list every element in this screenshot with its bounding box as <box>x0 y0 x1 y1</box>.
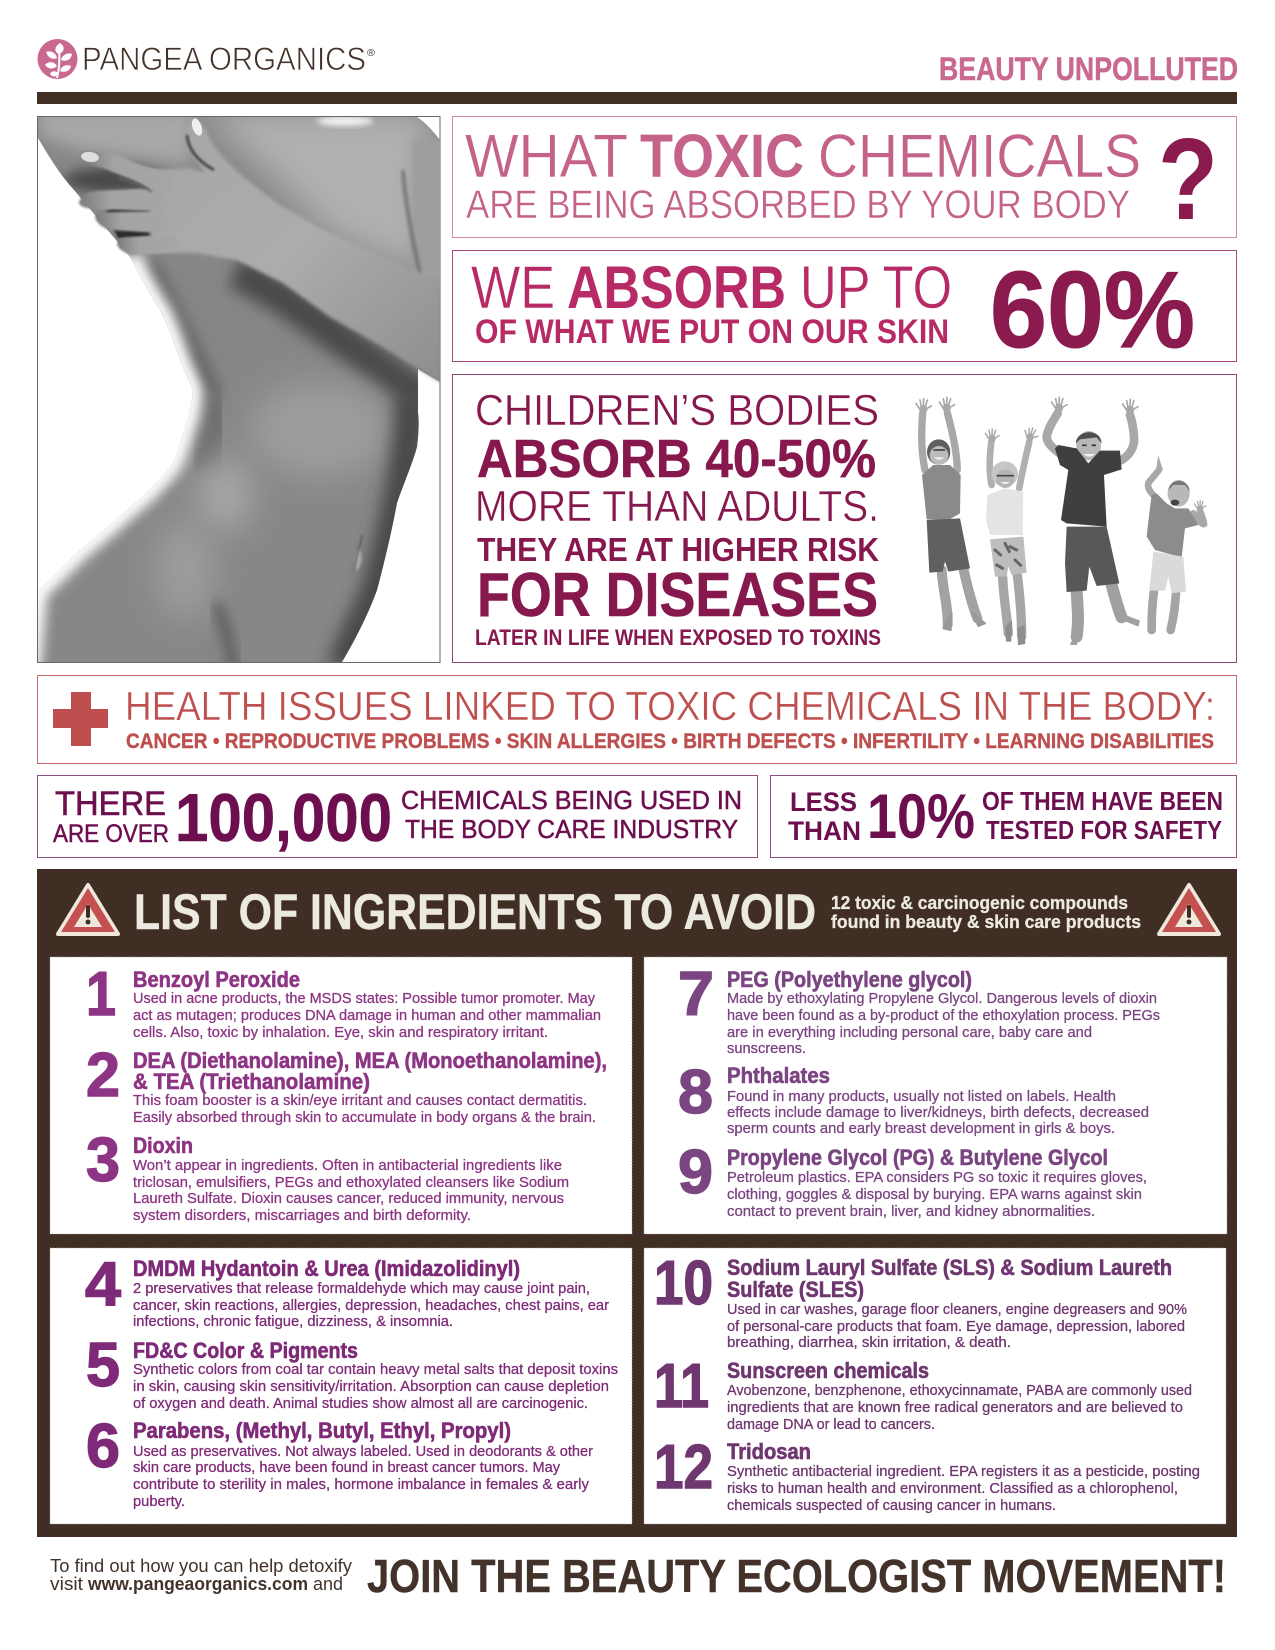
statistic: 60%: 60% <box>990 249 1195 371</box>
subheading: 12 toxic & carcinogenic compounds <box>831 893 1128 913</box>
ingredient 10: Sodium Lauryl Sulfate (SLS) & Sodium Laureth <box>727 1255 1172 1280</box>
text block: children absorb more <box>475 386 881 650</box>
ingredient 2: This foam booster is a skin/eye irritant and causes contact dermatitis. <box>133 1093 587 1109</box>
ingredient 2: DEA (Diethanolamine), MEA (Monoethanolamine), <box>133 1048 607 1073</box>
ingredient 9: contact to prevent brain, liver, and kidney abnormalities. <box>727 1204 1095 1220</box>
ingredient 11: Sunscreen chemicals <box>727 1358 929 1383</box>
subheading <box>831 893 1141 932</box>
question mark: ? <box>1158 114 1218 244</box>
ingredient 5: FD&C Color & Pigments <box>133 1338 358 1363</box>
ingredient 10: Sulfate (SLES) <box>727 1277 864 1302</box>
panel: ingredients 4 to 6 <box>50 1248 632 1524</box>
ingredient 1: Used in acne products, the MSDS states: Possible tumor promoter. May <box>133 991 596 1007</box>
panel: list of ingredients to avoid <box>37 869 1237 1537</box>
ingredient 10: 10 <box>654 1249 713 1318</box>
ingredient 6: puberty. <box>133 1494 185 1510</box>
heading: we absorb: OF WHAT WE PUT ON OUR SKIN <box>475 313 949 351</box>
ingredient 12: chemicals suspected of causing cancer in humans. <box>727 1498 1056 1514</box>
ingredient 7: 7 <box>678 960 714 1029</box>
ingredient 5: 5 <box>86 1331 120 1400</box>
ingredient 3: 3 <box>86 1126 120 1195</box>
panel: we absorb 60% <box>452 249 1236 371</box>
panel: 100,000 chemicals: ARE OVER <box>53 820 169 848</box>
panel: health issues <box>38 676 1236 764</box>
ingredient 8: sperm counts and early breast development in girls & boys. <box>727 1121 1115 1137</box>
panel: 100,000 chemicals: CHEMICALS BEING USED IN <box>401 785 742 815</box>
statistic: 100,000: 100,000 <box>175 780 392 856</box>
ingredient 4: cancer, skin reactions, allergies, depression, headaches, chest pains, ear <box>133 1298 609 1314</box>
footer: how to help: To find out how you can help detoxify <box>50 1555 353 1576</box>
ingredient 10: of personal-care products that foam. Eye damage, depression, labored <box>727 1319 1185 1335</box>
heading: we absorb: UP TO <box>800 254 952 321</box>
panel: children's bodies <box>452 374 1236 662</box>
ingredient 7: sunscreens. <box>727 1041 806 1057</box>
ingredient 10: Used in car washes, garage floor cleaners, engine degreasers and 90% <box>727 1302 1187 1318</box>
ingredient 12: 12 <box>654 1433 713 1502</box>
ingredient 3: system disorders, miscarriages and birth deformity. <box>133 1208 471 1224</box>
panel: 100,000 chemicals <box>38 776 758 858</box>
child 2 <box>985 426 1039 645</box>
ingredient 1: cells. Also, toxic by inhalation. Eye, skin and respiratory irritant. <box>133 1025 548 1041</box>
ingredient 4: 2 preservatives that release formaldehyde which may cause joint pain, <box>133 1281 590 1297</box>
ingredient 8: Found in many products, usually not listed on labels. Health <box>727 1089 1116 1105</box>
ingredient 2: & TEA (Triethanolamine) <box>133 1069 370 1094</box>
ingredient 6: Parabens, (Methyl, Butyl, Ethyl, Propyl) <box>133 1418 511 1443</box>
icon: warning triangle left <box>58 885 118 934</box>
footer: how to help: www.pangeaorganics.com <box>87 1573 308 1594</box>
footer: how to help: visit <box>50 1573 83 1594</box>
text block: children absorb more: CHILDREN’S BODIES <box>475 386 879 435</box>
panel: less than 10%: THAN <box>788 816 861 846</box>
panel: body photo <box>30 110 450 670</box>
heading: what toxic chemicals: WHAT <box>465 122 628 190</box>
ingredient 2: 2 <box>86 1041 120 1110</box>
ingredient 2 <box>86 1041 607 1126</box>
child 1 <box>916 397 985 630</box>
ingredient 4: infections, chronic fatigue, dizziness, & insomnia. <box>133 1314 453 1330</box>
heading: what toxic chemicals: CHEMICALS <box>818 122 1141 190</box>
heading: what toxic chemicals: TOXIC <box>640 122 804 190</box>
ingredient 9 <box>678 1138 1147 1220</box>
panel: less than 10%: TESTED FOR SAFETY <box>986 815 1222 845</box>
ingredient 2: Easily absorbed through skin to accumulate in body organs & the brain. <box>133 1110 596 1126</box>
logo: Pangea Organics: ® <box>367 48 376 59</box>
panel: less than 10% <box>770 776 1236 858</box>
ingredient 5: Synthetic colors from coal tar contain heavy metal salts that deposit toxins <box>133 1362 618 1378</box>
ingredient 7 <box>678 960 1160 1057</box>
child 4 <box>1147 455 1206 630</box>
ingredient 12: risks to human health and environment. Classified as a chlorophenol, <box>727 1481 1178 1497</box>
ingredient 10: breathing, diarrhea, skin irritation, & death. <box>727 1335 1011 1351</box>
ingredient 5: of oxygen and death. Animal studies show almost all are carcinogenic. <box>133 1396 588 1412</box>
icon: red cross <box>53 692 108 746</box>
photo: jumping children <box>916 397 1206 645</box>
heading: we absorb <box>471 254 952 351</box>
ingredient 8 <box>678 1058 1149 1137</box>
text block: children absorb more: MORE THAN ADULTS. <box>475 482 879 531</box>
panel: less than 10%: OF THEM HAVE BEEN <box>982 786 1223 816</box>
ingredient 11: Avobenzone, benzphenone, ethoxycinnamate, PABA are commonly used <box>727 1383 1192 1399</box>
ingredient 12: Tridosan <box>727 1439 811 1464</box>
ingredient 7: have been found as a by-product of the ethoxylation process. PEGs <box>727 1008 1160 1024</box>
ingredient 8: Phthalates <box>727 1063 830 1088</box>
child 3 <box>1047 397 1140 645</box>
panel: ingredients 7 to 9 <box>644 957 1227 1234</box>
ingredient 7: PEG (Polyethylene glycol) <box>727 967 972 992</box>
ingredient 11: 11 <box>654 1352 709 1421</box>
ingredient 1 <box>86 960 601 1041</box>
ingredient 8: 8 <box>678 1058 713 1127</box>
footer: how to help <box>50 1555 353 1594</box>
header bar <box>37 92 1237 104</box>
subheading: found in beauty & skin care products <box>831 912 1141 932</box>
panel: ingredients 10 to 12 <box>644 1248 1226 1524</box>
ingredient 12 <box>654 1433 1200 1514</box>
ingredient 1: 1 <box>86 960 116 1029</box>
ingredient 12: Synthetic antibacterial ingredient. EPA registers it as a pesticide, posting <box>727 1464 1200 1480</box>
heading: list of ingredients to avoid: LIST OF INGREDIENTS TO AVOID <box>134 884 816 940</box>
ingredient 7: are in everything including personal care, baby care and <box>727 1025 1092 1041</box>
heading: we absorb: WE <box>471 254 555 321</box>
ingredient 4 <box>85 1250 609 1330</box>
heading: what toxic chemicals <box>465 122 1141 227</box>
ingredient 4: DMDM Hydantoin & Urea (Imidazolidinyl) <box>133 1256 520 1281</box>
ingredient 6 <box>86 1412 593 1510</box>
logo: Pangea Organics: PANGEA ORGANICS <box>82 41 366 77</box>
ingredient 1: act as mutagen; produces DNA damage in human and other mammalian <box>133 1008 601 1024</box>
ingredient 5: in skin, causing skin sensitivity/irritation. Absorption can cause depletion <box>133 1379 609 1395</box>
ingredient 9: 9 <box>678 1138 713 1207</box>
ingredient 6: 6 <box>86 1412 120 1481</box>
ingredient 3: Dioxin <box>133 1133 193 1158</box>
panel: 100,000 chemicals: THE BODY CARE INDUSTRY <box>405 814 738 844</box>
heading: what toxic chemicals: ARE BEING ABSORBED BY YOUR BODY <box>466 183 1130 227</box>
ingredient 3: Laureth Sulfate. Dioxin causes cancer, reduced immunity, nervous <box>133 1191 564 1207</box>
text block: children absorb more: LATER IN LIFE WHEN EXPOSED TO TOXINS <box>475 625 881 650</box>
ingredient 9: Petroleum plastics. EPA considers PG so toxic it requires gloves, <box>727 1170 1147 1186</box>
ingredient 1: Benzoyl Peroxide <box>133 967 300 992</box>
text block: children absorb more: THEY ARE AT HIGHER RISK <box>477 531 879 568</box>
ingredient 3 <box>86 1126 569 1224</box>
text block: children absorb more: ABSORB 40-50% <box>477 429 876 489</box>
ingredient 3: triclosan, emulsifiers, PEGs and ethoxylated cleansers like Sodium <box>133 1175 569 1191</box>
text block: children absorb more: FOR DISEASES <box>477 561 878 630</box>
ingredient 11: damage DNA or lead to cancers. <box>727 1417 935 1433</box>
panel: ingredients 1 to 3 <box>50 957 632 1234</box>
ingredient 9: clothing, goggles & disposal by burying. EPA warns against skin <box>727 1187 1142 1203</box>
ingredient 7: Made by ethoxylating Propylene Glycol. Dangerous levels of dioxin <box>727 991 1157 1007</box>
panel: less than 10%: LESS <box>790 787 857 817</box>
icon: warning triangle right <box>1159 885 1219 934</box>
ingredient 4: 4 <box>85 1250 122 1319</box>
ingredient 8: effects include damage to liver/kidneys, birth defects, decreased <box>727 1105 1149 1121</box>
statistic: 10%: 10% <box>867 782 975 852</box>
heading: we absorb: ABSORB <box>567 254 786 321</box>
ingredient 6: Used as preservatives. Not always labeled. Used in deodorants & other <box>133 1444 593 1460</box>
ingredient 11 <box>654 1352 1192 1433</box>
ingredient 3: Won’t appear in ingredients. Often in antibacterial ingredients like <box>133 1158 562 1174</box>
ingredient 10 <box>654 1249 1187 1351</box>
ingredient 5 <box>86 1331 618 1412</box>
panel: what toxic chemicals <box>452 114 1236 244</box>
panel: 100,000 chemicals: THERE <box>55 785 166 823</box>
ingredient 6: skin care products, have been found in breast cancer tumors. May <box>133 1460 561 1476</box>
footer: how to help: and <box>313 1573 343 1594</box>
ingredient 6: contribute to sterility in males, hormone imbalance in females & early <box>133 1477 590 1493</box>
ingredient 9: Propylene Glycol (PG) & Butylene Glycol <box>727 1145 1108 1170</box>
ingredient 11: ingredients that are known free radical generators and are believed to <box>727 1400 1183 1416</box>
